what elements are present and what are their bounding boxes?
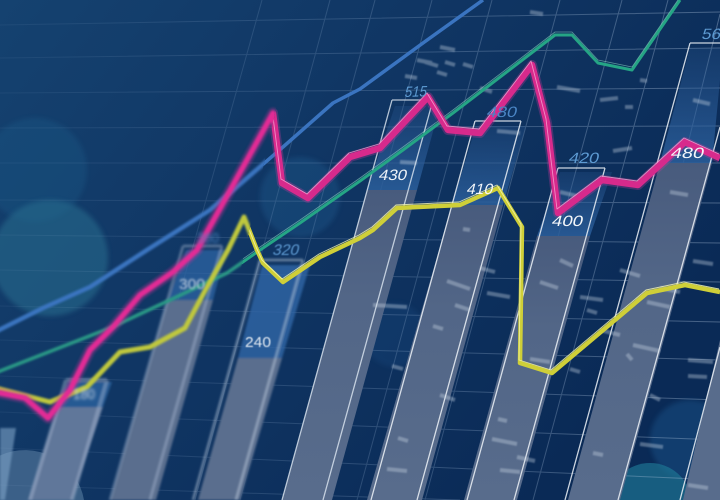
label: 410: 410	[465, 181, 495, 198]
label: 360: 360	[197, 230, 219, 247]
bokeh lights	[0, 118, 720, 500]
line: green	[0, 0, 680, 373]
label: 180: 180	[73, 386, 95, 403]
bar: second	[110, 246, 226, 500]
label: 320: 320	[271, 242, 301, 259]
label: 400: 400	[550, 213, 585, 230]
bar: 430	[282, 100, 440, 500]
data specks	[373, 12, 713, 488]
label: 430: 430	[377, 167, 409, 184]
bar: first	[28, 380, 112, 500]
line: yellow	[0, 185, 720, 402]
bar: third	[193, 260, 310, 500]
bar: 410	[367, 121, 526, 500]
label: 480 blue: 480	[485, 104, 519, 121]
value labels	[73, 26, 720, 403]
blurred left bars	[0, 246, 310, 500]
label: 300: 300	[179, 276, 205, 293]
label: 480 white: 480	[669, 145, 706, 162]
bar: right edge	[680, 340, 720, 500]
line: blue	[0, 0, 483, 332]
bar: 480	[565, 43, 720, 500]
bar: far left edge	[0, 428, 16, 500]
bar: 400	[464, 168, 612, 500]
label: 240: 240	[245, 334, 271, 351]
label: 515: 515	[403, 83, 429, 101]
label: 420: 420	[567, 150, 601, 167]
line: magenta	[0, 61, 720, 418]
